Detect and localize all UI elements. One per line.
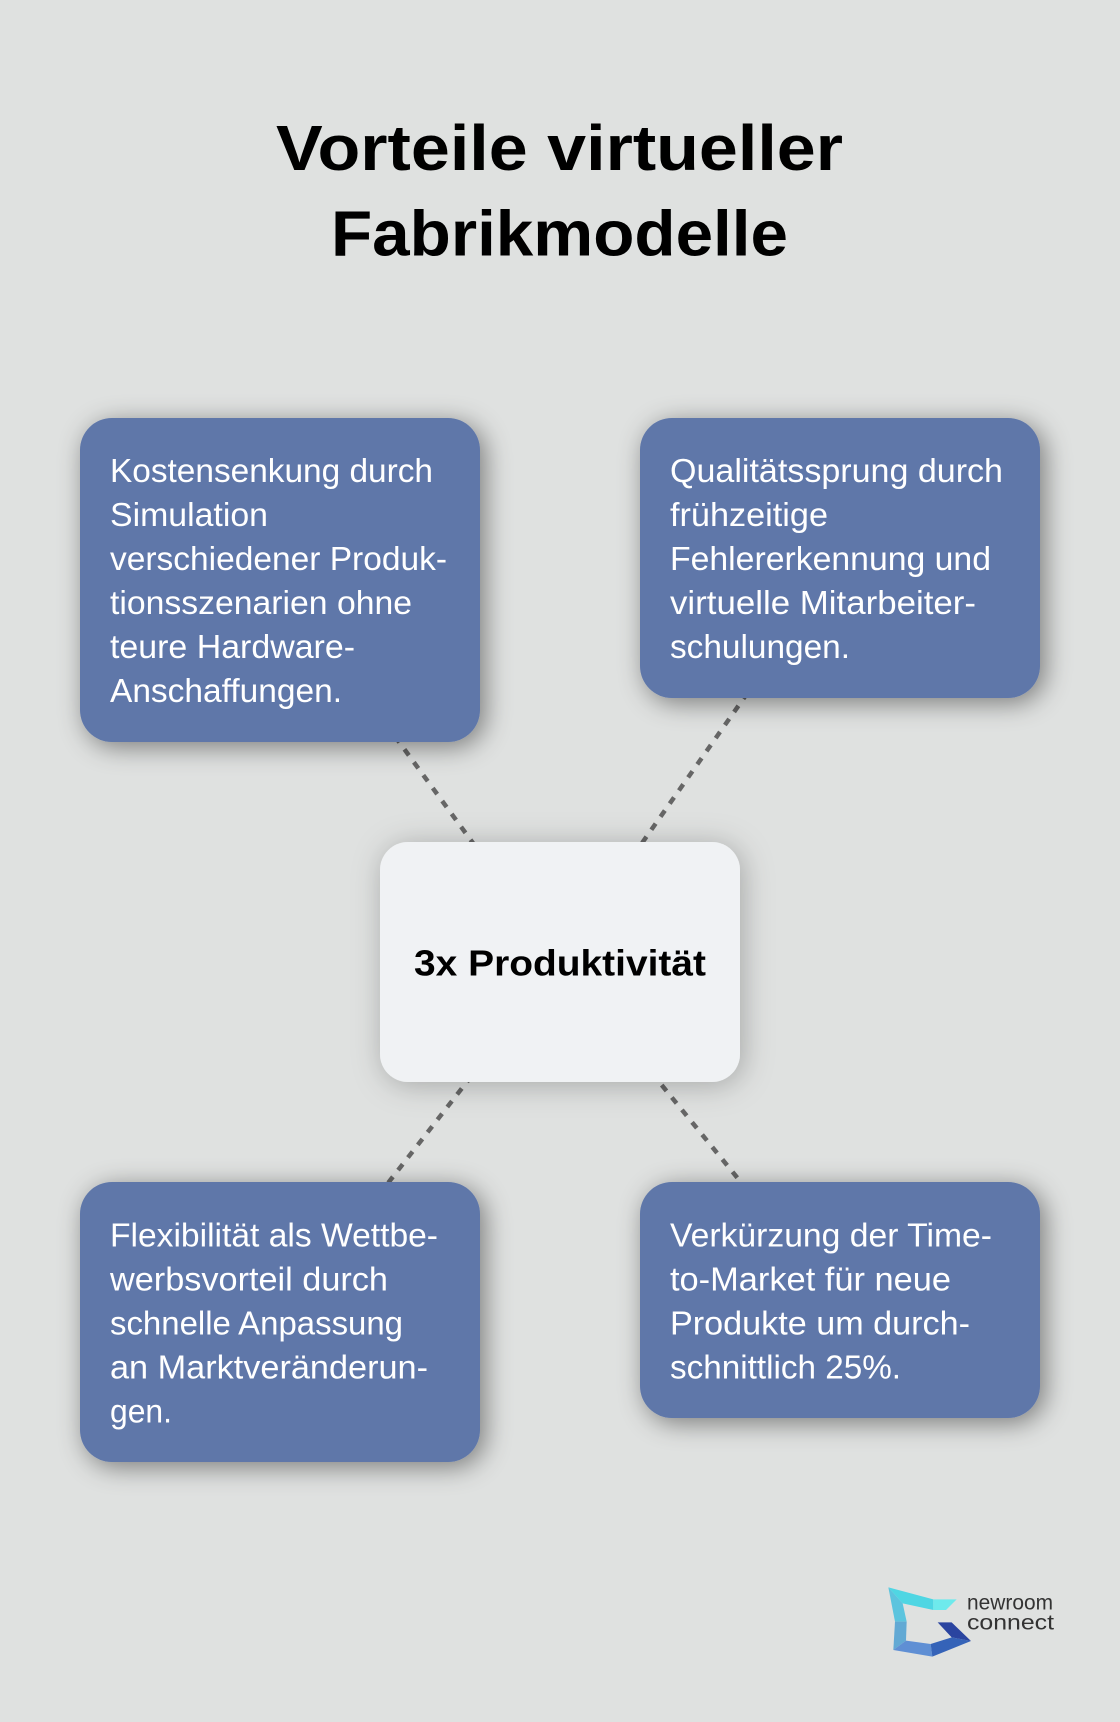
panel: flexibility: an Marktveränderun- xyxy=(110,1348,428,1385)
panel: time to market xyxy=(640,1182,1040,1418)
panel: time to market: schnittlich 25%. xyxy=(670,1348,901,1385)
panel: flexibility: schnelle Anpassung xyxy=(110,1304,403,1341)
panel: cost reduction: tionsszenarien ohne xyxy=(110,584,412,621)
panel: quality: schulungen. xyxy=(670,628,850,665)
panel: center productivity xyxy=(380,842,740,1082)
logo: newroom connect: connect xyxy=(967,1612,1054,1634)
panel: quality: virtuelle Mitarbeiter- xyxy=(670,584,976,621)
panel: cost reduction: verschiedener Produk- xyxy=(110,540,447,577)
title xyxy=(276,112,843,270)
title: Fabrikmodelle xyxy=(331,198,788,270)
panel: flexibility: gen. xyxy=(110,1392,172,1429)
panel: center productivity: 3x Produktivität xyxy=(414,943,706,984)
panel: cost reduction: Anschaffungen. xyxy=(110,672,342,709)
connector: top right xyxy=(637,680,757,850)
panel: time to market: Verkürzung der Time- xyxy=(670,1216,992,1253)
connector: bottom right xyxy=(652,1073,754,1198)
title: Vorteile virtueller xyxy=(276,112,843,184)
panel: cost reduction: Simulation xyxy=(110,496,268,533)
panel: cost reduction xyxy=(80,418,480,742)
panel: quality: frühzeitige xyxy=(670,496,828,533)
connector: top left xyxy=(395,736,480,853)
panel: quality xyxy=(640,418,1040,698)
panel: quality: Fehlererkennung und xyxy=(670,540,991,577)
logo: newroom connect: newroom xyxy=(967,1592,1053,1614)
panel: flexibility: werbsvorteil durch xyxy=(109,1260,388,1297)
panel: quality: Qualitätssprung durch xyxy=(670,452,1003,489)
icon: logo mark xyxy=(888,1587,971,1657)
panel: flexibility xyxy=(80,1182,480,1462)
logo: newroom connect xyxy=(888,1587,1054,1657)
connector: bottom left xyxy=(373,1076,472,1202)
panel: cost reduction: Kostensenkung durch xyxy=(110,452,433,489)
panel: cost reduction: teure Hardware- xyxy=(110,628,355,665)
panel: flexibility: Flexibilität als Wettbe- xyxy=(110,1216,438,1253)
panel: time to market: to-Market für neue xyxy=(670,1260,951,1297)
panel: time to market: Produkte um durch- xyxy=(670,1304,970,1341)
